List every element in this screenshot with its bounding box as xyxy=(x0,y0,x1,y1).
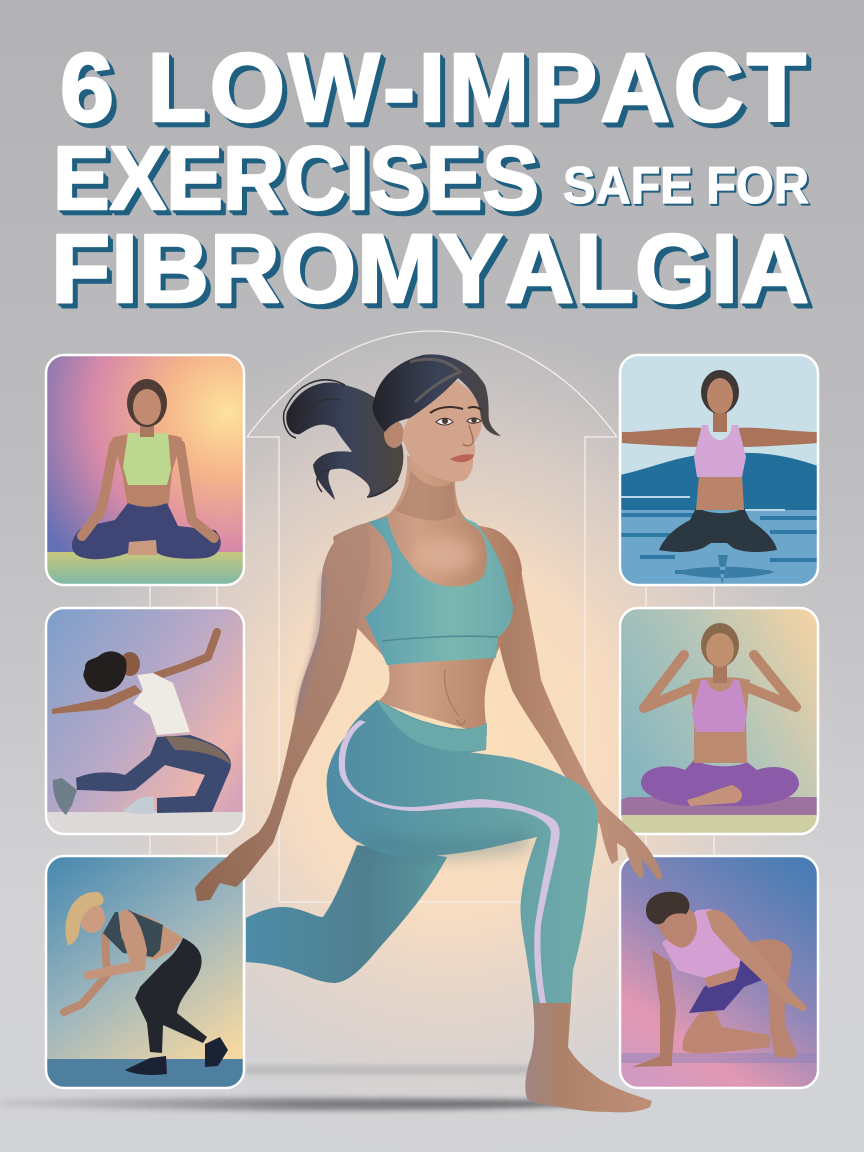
seated figure xyxy=(641,623,799,806)
chest highlight xyxy=(415,537,475,573)
panel 4: seated arm circles xyxy=(620,608,818,834)
arch frame and connector lines xyxy=(150,331,714,902)
water xyxy=(620,510,818,585)
floor shadow xyxy=(0,1066,600,1110)
shoes xyxy=(53,778,77,815)
panel 2 border xyxy=(620,355,818,585)
kneeling leg xyxy=(682,1010,770,1053)
floor shading xyxy=(620,1053,818,1063)
panel 6 border xyxy=(620,856,818,1088)
panel 5: standing forward bend xyxy=(46,856,244,1088)
kneeling figure xyxy=(622,370,818,585)
shorts xyxy=(689,960,762,1013)
abdomen detail xyxy=(445,670,465,724)
neck shadow xyxy=(395,470,456,520)
flyaway strands xyxy=(284,380,398,497)
left arm xyxy=(195,523,370,901)
standing foot xyxy=(525,1003,652,1112)
eyes and mouth xyxy=(430,407,481,462)
thigh shade xyxy=(365,830,530,859)
floor xyxy=(46,1059,244,1088)
shoes xyxy=(125,1037,228,1075)
raised leg xyxy=(750,939,797,1058)
title: FIBROMYALGIA xyxy=(51,214,809,323)
panel 4 border xyxy=(620,608,818,834)
hair highlight xyxy=(410,359,460,402)
mat xyxy=(46,552,244,585)
kneeling man xyxy=(632,892,807,1067)
reflection xyxy=(675,555,775,585)
panel 6: kneeling side stretch xyxy=(620,856,818,1088)
panel 5 border xyxy=(46,856,244,1088)
arm outer cool shade xyxy=(297,575,324,715)
main figure xyxy=(195,354,663,1112)
back leg xyxy=(246,845,447,983)
seated figure xyxy=(72,379,221,559)
torso xyxy=(333,455,522,735)
bending figure xyxy=(64,892,228,1075)
face xyxy=(402,378,482,482)
right arm xyxy=(485,527,663,880)
waistband and hip xyxy=(347,700,487,790)
leggings xyxy=(327,700,598,1003)
top band xyxy=(382,636,498,641)
title: EXERCISES xyxy=(53,129,539,229)
panel 2: water exercise xyxy=(620,355,818,585)
title: 6 LOW-IMPACT xyxy=(60,33,806,142)
mat xyxy=(620,797,818,815)
ponytail xyxy=(286,382,403,500)
ear xyxy=(384,420,404,448)
lunge figure xyxy=(52,632,231,815)
legging stripe xyxy=(339,720,560,1003)
waistband xyxy=(377,700,487,751)
hair xyxy=(373,354,501,436)
hills xyxy=(620,453,818,510)
sports top xyxy=(365,515,513,665)
panel 1: seated meditation xyxy=(46,355,244,585)
panel 1 border xyxy=(46,355,244,585)
panel 3 border xyxy=(46,608,244,834)
floor xyxy=(46,812,244,834)
title xyxy=(51,33,809,323)
panel 3: lunge and reach xyxy=(46,608,244,834)
title: SAFE FOR xyxy=(563,157,809,215)
